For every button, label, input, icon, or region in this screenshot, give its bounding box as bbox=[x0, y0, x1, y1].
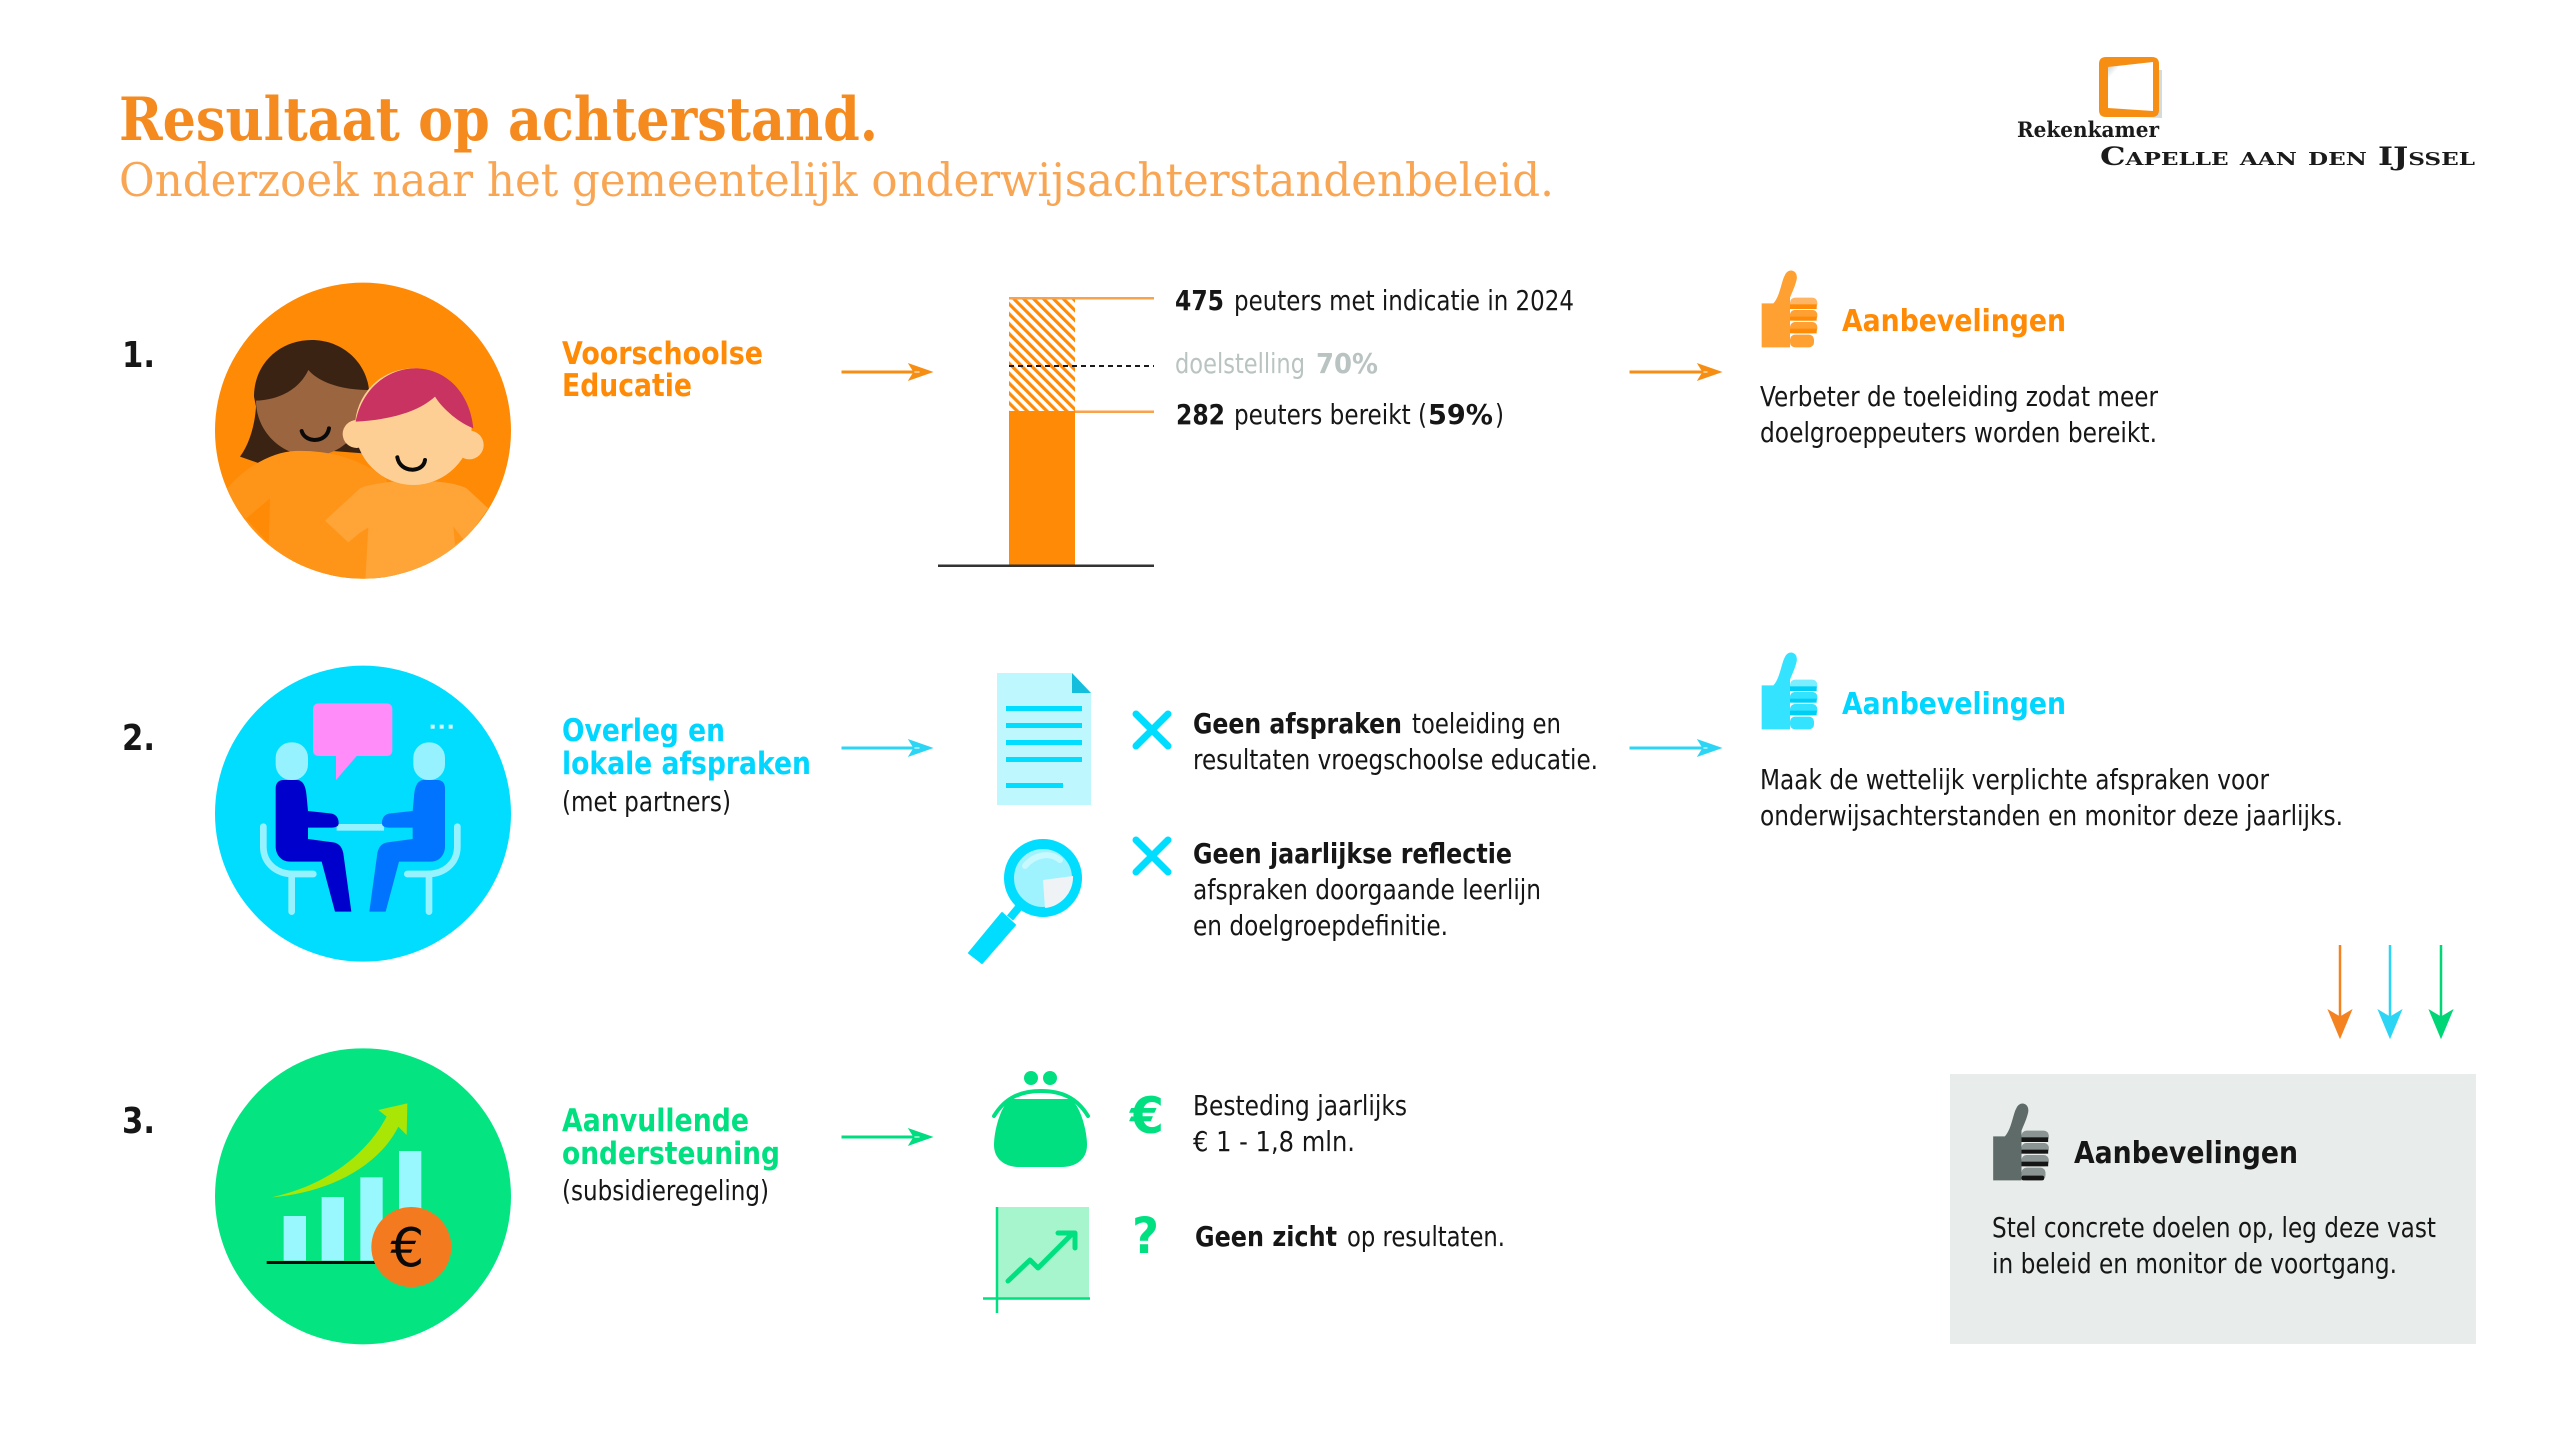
text: geen jaarlijkse reflectie: en doelgroepdefinitie. bbox=[1193, 909, 1448, 942]
heading: Overleg en lokale afspraken: (met partners) bbox=[562, 785, 731, 818]
heading: Aanbevelingen bbox=[1842, 304, 2066, 339]
panel: overall recommendation bbox=[1950, 1074, 2476, 1344]
icon: orange thumbs up bbox=[1762, 271, 1817, 347]
recommendation 2 bbox=[1760, 653, 2343, 832]
heading: Aanbevelingen bbox=[1842, 687, 2066, 722]
text: besteding bbox=[1193, 1089, 1407, 1158]
arrow: cyan to recommendation bbox=[1630, 740, 1721, 756]
text: Maak de wettelijk verplichte afspraken voor bbox=[1760, 763, 2269, 796]
text bbox=[1760, 380, 2158, 449]
text: geen jaarlijkse reflectie: Geen jaarlijkse reflectie bbox=[1193, 837, 1512, 870]
icon: cross 1 bbox=[1136, 714, 1168, 746]
text: geen zicht: op resultaten. bbox=[1347, 1220, 1505, 1253]
hatched bar: indicated toddlers bbox=[1009, 298, 1075, 411]
arrow: green down bbox=[2431, 945, 2451, 1036]
heading: Voorschoolse Educatie: Educatie bbox=[562, 368, 692, 404]
text: Stel concrete doelen op, leg deze vast bbox=[1992, 1211, 2436, 1244]
bar chart: peuters bbox=[938, 284, 1574, 567]
heading: Aanvullende ondersteuning bbox=[562, 1103, 780, 1207]
subtitle: Onderzoek naar het gemeentelijk onderwijsachterstandenbeleid. bbox=[119, 153, 1554, 207]
label: 282: ) bbox=[1495, 398, 1504, 431]
solid bar: reached toddlers bbox=[1009, 411, 1075, 565]
text: in beleid en monitor de voortgang. bbox=[1992, 1247, 2397, 1280]
row 1 number: 1. bbox=[122, 335, 155, 376]
heading: Voorschoolse Educatie: Voorschoolse bbox=[562, 336, 763, 372]
heading: Aanvullende ondersteuning: ondersteuning bbox=[562, 1136, 780, 1172]
logo: Rekenkamer Capelle aan den IJssel: Rekenkamer bbox=[2017, 117, 2160, 142]
text: geen afspraken: toeleiding en bbox=[1412, 707, 1561, 740]
label: doelstelling: doelstelling bbox=[1175, 347, 1305, 380]
icon: two people talking in cyan circle bbox=[215, 666, 511, 962]
label: 282: peuters bereikt ( bbox=[1234, 398, 1427, 431]
recommendation 1 bbox=[1760, 271, 2158, 449]
arrow: cyan to findings bbox=[842, 740, 932, 756]
text: onderwijsachterstanden en monitor deze jaarlijks. bbox=[1760, 799, 2343, 832]
icon: question mark: ? bbox=[1132, 1207, 1159, 1265]
arrow: cyan down bbox=[2380, 945, 2400, 1036]
icon: magnifying glass bbox=[969, 844, 1077, 963]
icon: purse bbox=[994, 1071, 1088, 1167]
heading: Voorschoolse Educatie bbox=[562, 336, 763, 404]
text: geen zicht: Geen zicht bbox=[1195, 1220, 1337, 1253]
arrow: green to findings bbox=[842, 1129, 932, 1145]
icon: bar chart with euro in green circle: € bbox=[390, 1216, 424, 1279]
text bbox=[1760, 763, 2343, 832]
label: 282: 59% bbox=[1428, 398, 1493, 431]
icon: bar chart with euro in green circle bbox=[215, 1048, 511, 1344]
text: Verbeter de toeleiding zodat meer bbox=[1760, 380, 2158, 413]
text bbox=[1992, 1211, 2436, 1280]
icon: cyan thumbs up bbox=[1762, 653, 1817, 729]
main heading: Resultaat op achterstand. bbox=[119, 85, 878, 155]
heading: Overleg en lokale afspraken bbox=[562, 713, 811, 818]
heading: Aanbevelingen bbox=[2074, 1136, 2298, 1171]
icon: two toddlers in orange circle bbox=[215, 283, 511, 583]
heading: Overleg en lokale afspraken: lokale afspraken bbox=[562, 746, 811, 782]
text: geen zicht bbox=[1195, 1220, 1505, 1253]
heading: Aanvullende ondersteuning: Aanvullende bbox=[562, 1103, 749, 1139]
label: doelstelling: 70% bbox=[1316, 347, 1378, 380]
icon: euro sign: € bbox=[1129, 1087, 1164, 1145]
icon: cross 2 bbox=[1136, 840, 1168, 872]
text: geen jaarlijkse reflectie: afspraken doorgaande leerlijn bbox=[1193, 873, 1541, 906]
icon: growth chart bbox=[983, 1207, 1090, 1313]
arrow: orange down bbox=[2330, 945, 2350, 1036]
icon: grey thumbs up bbox=[1993, 1104, 2049, 1180]
row 2 number: 2. bbox=[122, 718, 155, 759]
logo: Rekenkamer Capelle aan den IJssel: Capelle aan den IJssel bbox=[2100, 142, 2475, 171]
label: 282: 282 bbox=[1176, 398, 1225, 431]
row 3 number: 3. bbox=[122, 1101, 155, 1142]
text: geen jaarlijkse reflectie bbox=[1193, 837, 1541, 942]
arrow: orange to chart bbox=[842, 364, 932, 380]
text: besteding: Besteding jaarlijks bbox=[1193, 1089, 1407, 1122]
title bbox=[119, 85, 1554, 207]
label: 475: 475 bbox=[1175, 284, 1224, 317]
text: besteding: € 1 - 1,8 mln. bbox=[1193, 1125, 1355, 1158]
arrow: orange to recommendation bbox=[1630, 364, 1721, 380]
text: doelgroeppeuters worden bereikt. bbox=[1760, 416, 2157, 449]
heading: Aanvullende ondersteuning: (subsidieregeling) bbox=[562, 1174, 769, 1207]
logo: Rekenkamer Capelle aan den IJssel bbox=[2017, 57, 2475, 171]
icon: document bbox=[997, 673, 1091, 805]
heading: Overleg en lokale afspraken: Overleg en bbox=[562, 713, 725, 749]
text: geen afspraken: resultaten vroegschoolse educatie. bbox=[1193, 743, 1598, 776]
text: geen afspraken bbox=[1193, 707, 1598, 776]
text: geen afspraken: Geen afspraken bbox=[1193, 707, 1402, 740]
label: 475: peuters met indicatie in 2024 bbox=[1234, 284, 1574, 317]
